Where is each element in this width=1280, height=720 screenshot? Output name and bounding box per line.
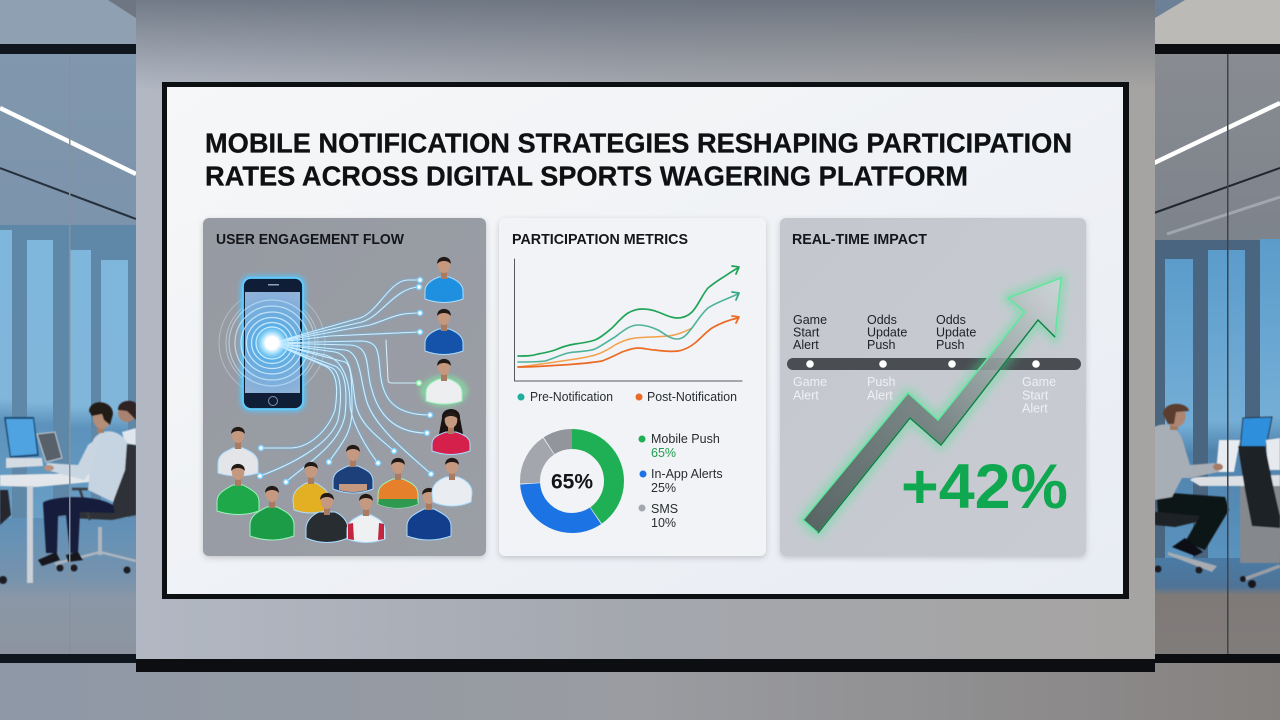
icon: smartphone: [240, 275, 306, 412]
stat: +42%: +42%: [901, 452, 1068, 522]
donut legend: 25%: [651, 481, 676, 495]
timeline labels above: Push: [936, 338, 965, 352]
avatar: user white top left: [218, 427, 258, 476]
avatar: user navy: [407, 488, 451, 540]
timeline labels below: Alert: [793, 388, 819, 402]
notification flow lines: [260, 280, 431, 482]
outer signal rings: [219, 290, 325, 396]
avatar: user dark blue: [425, 309, 463, 354]
growth arrow: [803, 278, 1061, 533]
donut legend: Mobile Push: [651, 432, 720, 446]
heading: participation metrics: PARTICIPATION METRICS: [512, 231, 688, 248]
user avatars: [217, 257, 472, 542]
avatar: user navy jersey: [333, 445, 373, 493]
timeline labels above: Odds: [867, 313, 897, 327]
timeline labels above: Alert: [793, 338, 819, 352]
skirting band: [136, 659, 1155, 672]
timeline labels above: Start: [793, 326, 820, 340]
timeline bar: [787, 358, 1081, 370]
timeline labels below: Game: [793, 375, 827, 389]
timeline labels below: Game: [1022, 375, 1056, 389]
timeline labels above: Game: [793, 313, 827, 327]
avatar: user white green glow: [420, 359, 468, 407]
donut legend: [638, 432, 723, 530]
right office worker: [1154, 404, 1280, 588]
donut chart: [530, 439, 614, 523]
panel: participation metrics: [499, 218, 766, 556]
chart legend: Post-Notification: [647, 390, 737, 404]
heading: user engagement flow: USER ENGAGEMENT FLOW: [216, 231, 405, 248]
heading: real-time impact: REAL-TIME IMPACT: [792, 231, 927, 248]
donut legend: In-App Alerts: [651, 467, 723, 481]
avatar: user red female: [432, 409, 470, 454]
avatar: user sky blue: [425, 257, 463, 302]
avatar: user yellow: [293, 462, 329, 513]
avatar: user white and red kit: [347, 494, 385, 542]
timeline labels below: Push: [867, 375, 896, 389]
timeline labels above: Push: [867, 338, 896, 352]
chair: [70, 444, 136, 520]
donut legend: 10%: [651, 516, 676, 530]
left office workers: [0, 401, 136, 584]
avatar: user orange: [378, 458, 418, 508]
display frame: [162, 82, 1129, 599]
timeline labels above: Update: [867, 326, 907, 340]
title: [205, 128, 1072, 192]
timeline labels below: Alert: [1022, 402, 1048, 416]
avatar: user black hoodie: [306, 493, 348, 542]
timeline labels below: [793, 375, 1056, 416]
title: MOBILE NOTIFICATION STRATEGIES RESHAPING PARTICIPATION: [205, 128, 1072, 158]
donut value: 65%: [551, 470, 593, 494]
signal rings: [229, 300, 315, 386]
timeline labels above: [793, 313, 976, 352]
right office: [1154, 0, 1280, 663]
donut legend: SMS: [651, 502, 678, 516]
panel: real-time impact: [780, 218, 1086, 556]
first person: [43, 497, 115, 553]
timeline labels above: Odds: [936, 313, 966, 327]
timeline labels above: Update: [936, 326, 976, 340]
avatar: user green: [217, 464, 259, 514]
left office: [0, 0, 136, 663]
floor: [0, 663, 1280, 720]
avatar: user green kit: [250, 486, 294, 540]
wall: [136, 0, 1155, 662]
glass mullions: [69, 54, 1228, 654]
chart legend: Pre-Notification: [530, 390, 613, 404]
timeline labels below: Start: [1022, 388, 1049, 402]
signal core: [255, 326, 289, 360]
title: RATES ACROSS DIGITAL SPORTS WAGERING PLATFORM: [205, 160, 968, 192]
donut legend: 65%: [651, 446, 676, 460]
line end nodes: [258, 278, 434, 484]
second person: [122, 428, 136, 445]
line chart: [514, 259, 742, 381]
chart legend: [518, 390, 737, 404]
panel: user engagement flow: [203, 218, 486, 556]
avatar: user white jacket: [432, 458, 472, 506]
timeline labels below: Alert: [867, 388, 893, 402]
